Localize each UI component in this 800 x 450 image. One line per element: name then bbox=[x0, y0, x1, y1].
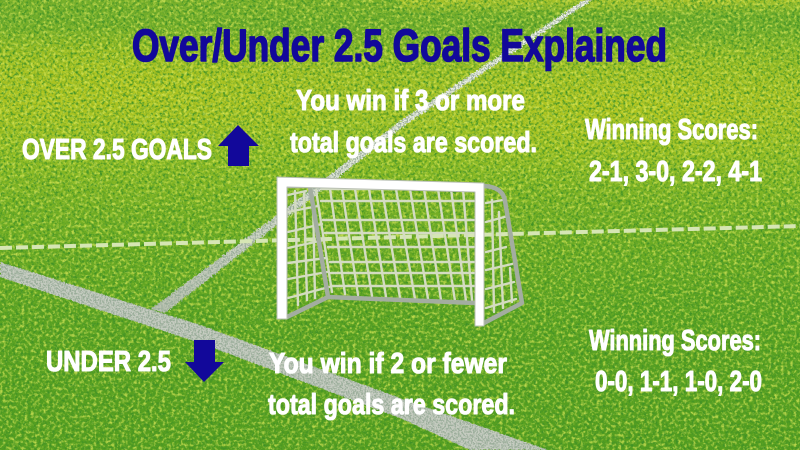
back net bbox=[316, 189, 474, 301]
text: over win condition: total goals are scored. bbox=[290, 127, 537, 159]
label: under 2.5: UNDER 2.5 bbox=[46, 346, 171, 378]
icon: up arrow bbox=[218, 125, 259, 166]
text: over win condition bbox=[290, 85, 537, 159]
text: under win condition bbox=[268, 348, 515, 421]
text: under win condition: You win if 2 or fewer bbox=[269, 348, 507, 380]
title: Over/Under 2.5 Goals Explained bbox=[132, 20, 667, 71]
text: over win condition: You win if 3 or more bbox=[296, 85, 525, 117]
label: over 2.5 goals: OVER 2.5 GOALS bbox=[22, 134, 212, 166]
white posts and crossbar bbox=[277, 177, 484, 326]
gray frame bbox=[287, 186, 522, 323]
icon: down arrow bbox=[185, 340, 224, 382]
left side net bbox=[288, 191, 329, 305]
text: over winning scores bbox=[585, 114, 762, 188]
text: over winning scores: 2-1, 3-0, 2-2, 4-1 bbox=[589, 156, 762, 188]
text: under winning scores bbox=[589, 325, 762, 398]
right side net bbox=[486, 200, 516, 312]
icon: goal bbox=[277, 177, 522, 326]
text: under win condition: total goals are scored. bbox=[268, 389, 515, 421]
